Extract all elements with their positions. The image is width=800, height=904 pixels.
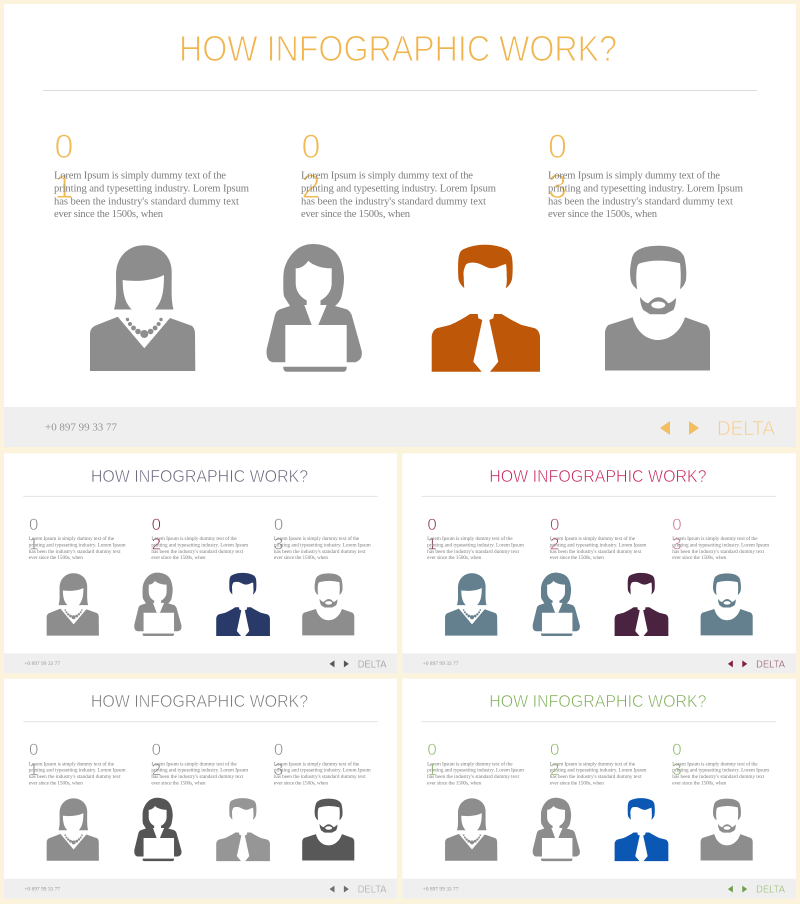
brand: DELTA — [717, 418, 776, 440]
text block 2: has been the industry's standard dummy text — [301, 196, 486, 208]
brand: DELTA — [358, 659, 387, 670]
footer bar — [4, 407, 796, 447]
text block 1: printing and typesetting industry. Lorem Ipsum — [54, 184, 250, 194]
text block 3: Lorem Ipsum is simply dummy text of the — [274, 535, 360, 542]
step number 03: 3 — [672, 760, 682, 779]
text block 3: ever since the 1500s, when — [548, 209, 658, 220]
step number 02: 0 — [550, 515, 559, 534]
text block 3: has been the industry's standard dummy text — [274, 774, 366, 780]
footer bar — [4, 879, 397, 899]
text block 2: ever since the 1500s, when — [301, 209, 411, 220]
text block 3: has been the industry's standard dummy text — [672, 774, 765, 780]
icon: woman with necklace — [47, 573, 99, 636]
panel: main slide, amber theme — [4, 4, 796, 447]
icon: woman with necklace — [445, 798, 497, 861]
text block 3: printing and typesetting industry. Lorem Ipsum — [672, 768, 769, 774]
text block 2: has been the industry's standard dummy text — [151, 774, 244, 780]
icon: woman with laptop — [533, 573, 580, 636]
icon: woman with necklace — [47, 798, 99, 861]
arrow right — [689, 421, 699, 435]
panel: small slide, monochrome theme — [4, 679, 397, 899]
footer bar — [402, 879, 796, 899]
text block 2: Lorem Ipsum is simply dummy text of the — [301, 170, 473, 182]
step number 03: 0 — [274, 740, 283, 759]
text block 3: has been the industry's standard dummy text — [672, 549, 765, 555]
text block 3: Lorem Ipsum is simply dummy text of the — [274, 760, 360, 767]
text block 1: has been the industry's standard dummy text — [29, 549, 121, 555]
text block 3: has been the industry's standard dummy text — [274, 549, 366, 555]
step number 01: 0 — [29, 515, 38, 534]
footer bar — [4, 653, 397, 673]
step number 03: 3 — [672, 535, 682, 554]
text block 2: ever since the 1500s, when — [151, 555, 206, 561]
step number 03: 3 — [548, 168, 567, 206]
text block 2: ever since the 1500s, when — [550, 780, 604, 786]
text block 3: ever since the 1500s, when — [672, 555, 727, 561]
step number 02: 0 — [302, 128, 320, 166]
text block 3: has been the industry's standard dummy text — [548, 196, 733, 208]
step number 02: 2 — [550, 760, 559, 779]
brand: DELTA — [756, 659, 785, 670]
text block 1: printing and typesetting industry. Lorem Ipsum — [427, 768, 524, 774]
text block 3: printing and typesetting industry. Lorem Ipsum — [672, 543, 769, 549]
text block 1: Lorem Ipsum is simply dummy text of the — [29, 535, 115, 542]
text block 2: Lorem Ipsum is simply dummy text of the — [550, 760, 636, 767]
icon: man in suit — [216, 798, 270, 861]
text block 2: Lorem Ipsum is simply dummy text of the — [151, 535, 237, 542]
phone number: +0 897 99 33 77 — [45, 422, 118, 434]
step number 01: 0 — [54, 128, 73, 166]
arrow right — [742, 660, 747, 667]
panel: small slide, navy theme — [4, 453, 397, 673]
arrow left — [329, 660, 334, 667]
title: HOW INFOGRAPHIC WORK? — [179, 28, 617, 69]
text block 2: printing and typesetting industry. Lorem Ipsum — [550, 768, 647, 774]
text block 3: printing and typesetting industry. Lorem Ipsum — [274, 768, 371, 774]
text block 1: printing and typesetting industry. Lorem Ipsum — [29, 543, 126, 549]
step number 03: 0 — [672, 740, 682, 759]
phone number: +0 897 99 33 77 — [423, 661, 459, 667]
icon: woman with laptop — [134, 573, 182, 636]
icon: woman with laptop — [134, 798, 182, 861]
step number 01: 1 — [29, 760, 38, 779]
text block 1: Lorem Ipsum is simply dummy text of the — [54, 170, 226, 182]
step number 02: 0 — [152, 740, 161, 759]
title: HOW INFOGRAPHIC WORK? — [91, 466, 308, 486]
icon: bearded man — [701, 573, 753, 635]
text block 2: has been the industry's standard dummy text — [151, 549, 244, 555]
text block 3: ever since the 1500s, when — [274, 555, 328, 561]
step number 02: 2 — [550, 535, 559, 554]
arrow left — [660, 421, 670, 435]
arrow left — [728, 886, 733, 893]
text block 2: has been the industry's standard dummy text — [550, 549, 642, 555]
step number 02: 2 — [152, 535, 161, 554]
text block 2: printing and typesetting industry. Lorem Ipsum — [301, 184, 497, 194]
text block 2: Lorem Ipsum is simply dummy text of the — [550, 535, 636, 542]
step number 01: 1 — [54, 168, 73, 206]
icon: man in suit — [615, 798, 668, 861]
arrow right — [344, 886, 349, 893]
text block 1: has been the industry's standard dummy text — [54, 196, 239, 208]
icon: man in suit — [216, 573, 270, 636]
brand: DELTA — [756, 885, 785, 896]
icon: bearded man — [302, 573, 354, 635]
footer bar — [402, 653, 796, 673]
text block 1: printing and typesetting industry. Lorem Ipsum — [427, 543, 524, 549]
step number 01: 0 — [427, 515, 437, 534]
panel: small slide, crimson theme — [402, 453, 796, 673]
phone number: +0 897 99 33 77 — [24, 886, 60, 892]
step number 03: 0 — [548, 128, 567, 166]
icon: bearded man — [302, 799, 354, 861]
text block 1: has been the industry's standard dummy text — [29, 774, 121, 780]
text block 1: ever since the 1500s, when — [54, 209, 164, 220]
text block 3: Lorem Ipsum is simply dummy text of the — [672, 535, 758, 542]
icon: man in suit — [615, 573, 668, 636]
arrow right — [344, 660, 349, 667]
text block 3: printing and typesetting industry. Lorem Ipsum — [274, 543, 371, 549]
icon: bearded man — [701, 799, 753, 861]
text block 3: ever since the 1500s, when — [274, 780, 328, 786]
text block 3: ever since the 1500s, when — [672, 780, 727, 786]
text block 1: ever since the 1500s, when — [427, 555, 482, 561]
text block 1: ever since the 1500s, when — [29, 780, 83, 786]
step number 01: 0 — [427, 740, 437, 759]
arrow left — [329, 886, 334, 893]
title: HOW INFOGRAPHIC WORK? — [489, 466, 707, 486]
text block 3: Lorem Ipsum is simply dummy text of the — [548, 170, 720, 182]
text block 1: Lorem Ipsum is simply dummy text of the — [29, 760, 115, 767]
phone number: +0 897 99 33 77 — [24, 661, 60, 667]
icon: bearded man — [605, 246, 710, 370]
panel: small slide, green and blue theme — [402, 679, 796, 899]
text block 2: printing and typesetting industry. Lorem Ipsum — [151, 543, 248, 549]
icon: woman with laptop — [533, 798, 580, 861]
arrow left — [728, 660, 733, 667]
step number 03: 0 — [672, 515, 682, 534]
text block 2: printing and typesetting industry. Lorem Ipsum — [151, 768, 248, 774]
text block 1: has been the industry's standard dummy text — [427, 549, 520, 555]
step number 03: 3 — [274, 535, 283, 554]
text block 1: Lorem Ipsum is simply dummy text of the — [427, 760, 513, 767]
step number 01: 0 — [29, 740, 38, 759]
step number 01: 1 — [427, 760, 437, 779]
phone number: +0 897 99 33 77 — [423, 886, 459, 892]
icon: woman with necklace — [445, 573, 497, 636]
text block 1: Lorem Ipsum is simply dummy text of the — [427, 535, 513, 542]
text block 1: ever since the 1500s, when — [29, 555, 83, 561]
text block 2: has been the industry's standard dummy text — [550, 774, 642, 780]
step number 03: 0 — [274, 515, 283, 534]
brand: DELTA — [358, 885, 387, 896]
text block 2: ever since the 1500s, when — [151, 780, 206, 786]
step number 03: 3 — [274, 760, 283, 779]
text block 3: Lorem Ipsum is simply dummy text of the — [672, 760, 758, 767]
step number 02: 2 — [152, 760, 161, 779]
text block 2: ever since the 1500s, when — [550, 555, 604, 561]
title: HOW INFOGRAPHIC WORK? — [489, 691, 707, 711]
text block 2: Lorem Ipsum is simply dummy text of the — [151, 760, 237, 767]
step number 02: 2 — [302, 168, 320, 206]
text block 1: printing and typesetting industry. Lorem Ipsum — [29, 768, 126, 774]
text block 2: printing and typesetting industry. Lorem Ipsum — [550, 543, 647, 549]
step number 01: 1 — [427, 535, 437, 554]
text block 1: ever since the 1500s, when — [427, 780, 482, 786]
step number 02: 0 — [152, 515, 161, 534]
step number 01: 1 — [29, 535, 38, 554]
text block 1: has been the industry's standard dummy text — [427, 774, 520, 780]
arrow right — [742, 886, 747, 893]
icon: woman with laptop — [267, 244, 362, 372]
icon: woman with necklace — [90, 245, 195, 371]
text block 3: printing and typesetting industry. Lorem Ipsum — [548, 184, 744, 194]
step number 02: 0 — [550, 740, 559, 759]
title: HOW INFOGRAPHIC WORK? — [91, 691, 308, 711]
icon: man in suit — [432, 245, 540, 372]
